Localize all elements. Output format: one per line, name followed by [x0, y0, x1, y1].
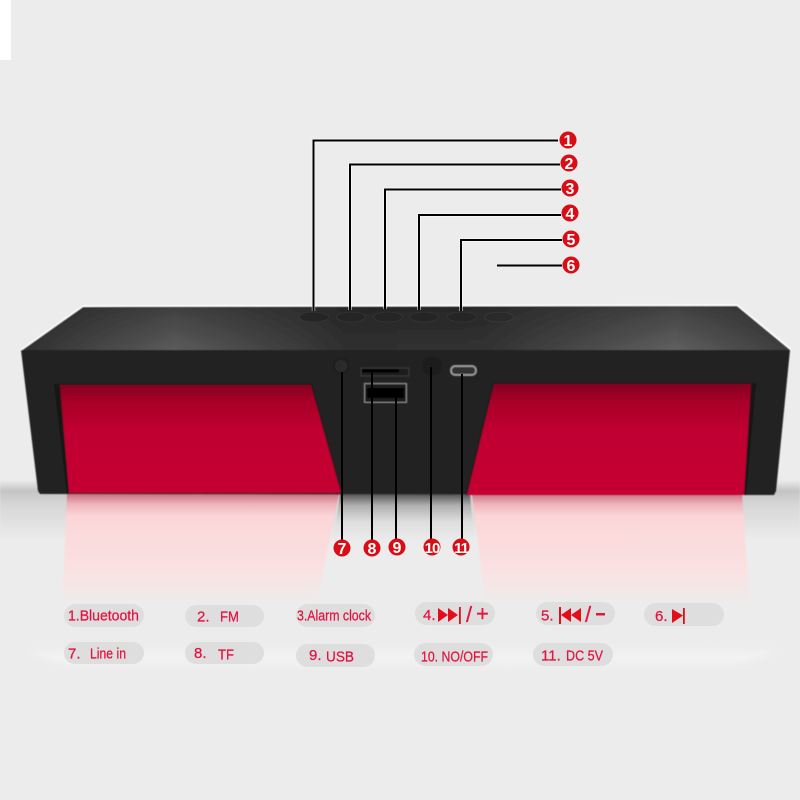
legend 5 previous and volume down: /	[585, 602, 592, 627]
badge 4: 4	[566, 206, 575, 223]
badge 7: 7	[338, 541, 347, 558]
USB port	[364, 384, 406, 402]
badge 10: 10	[425, 540, 440, 557]
left red reflection	[62, 494, 339, 606]
legend 9 USB	[296, 644, 375, 667]
badge 4	[562, 204, 578, 223]
badge 11: 11	[454, 540, 469, 557]
button 3	[374, 312, 402, 322]
legend 5 previous and volume down	[536, 602, 615, 627]
badge 5: 5	[567, 232, 576, 249]
legend 10 NO/OFF	[414, 643, 493, 666]
legend 11 DC 5V: 11.	[541, 648, 561, 664]
floor shadow band	[0, 480, 800, 540]
ports	[334, 356, 476, 402]
legend 7 Line in: Line in	[90, 646, 126, 662]
right red reflection	[472, 494, 750, 606]
micro USB port	[451, 366, 476, 375]
legend	[64, 601, 724, 667]
callout leaders bottom	[342, 367, 462, 540]
leader 1	[314, 140, 558, 311]
legend 10 NO/OFF: 10. NO/OFF	[421, 648, 488, 666]
legend 8 TF: TF	[218, 646, 234, 664]
TF card slot	[361, 368, 409, 376]
top edge highlight	[21, 305, 791, 350]
leader 10	[430, 367, 432, 540]
legend 6 play	[644, 603, 724, 626]
line-in jack	[334, 359, 348, 373]
leader 2	[350, 164, 560, 310]
right grille recess	[466, 383, 756, 495]
legend 4 next and volume up	[415, 601, 495, 627]
legend 8 TF	[185, 642, 264, 664]
white corner block	[0, 0, 11, 60]
legend 9 USB: USB	[326, 648, 354, 666]
light streak behind lower labels	[22, 645, 782, 669]
top face	[21, 306, 790, 350]
legend 3 Alarm clock	[296, 604, 375, 627]
button 1	[300, 312, 328, 322]
legend 5 previous and volume down: 5.	[541, 608, 554, 624]
legend 4 next and volume up: +	[476, 601, 489, 626]
leader 3	[385, 190, 561, 309]
leader 7	[341, 372, 343, 540]
left grille recess	[54, 384, 342, 494]
centre dark reflection	[334, 494, 474, 540]
legend 4 next and volume up: 4.	[423, 607, 436, 624]
badge 2	[560, 154, 578, 173]
leader 5	[461, 240, 562, 311]
badge 1	[560, 132, 576, 150]
legend 2 FM: 2.	[197, 608, 210, 626]
speaker floor reflections	[62, 494, 750, 606]
legend 3 Alarm clock: 3.Alarm clock	[297, 608, 371, 624]
badge 6	[562, 256, 580, 275]
badge 9	[388, 538, 406, 557]
badge 3	[562, 180, 578, 198]
badge 2: 2	[565, 156, 574, 173]
badge 3: 3	[566, 181, 575, 198]
legend 11 DC 5V	[533, 643, 613, 666]
legend 11 DC 5V: DC 5V	[566, 648, 603, 664]
legend 1 Bluetooth: 1.Bluetooth	[68, 608, 139, 624]
legend 2 FM	[185, 605, 264, 627]
leader 11	[461, 374, 463, 540]
button 5	[448, 312, 476, 322]
button 2	[336, 312, 366, 322]
leader 4	[419, 215, 561, 310]
leader 9	[395, 396, 397, 540]
legend 6 play: 6.	[655, 608, 668, 625]
speaker body	[21, 305, 791, 495]
legend 4 next and volume up: /	[466, 602, 473, 627]
badge 8	[364, 540, 380, 558]
legend 9 USB: 9.	[309, 647, 322, 664]
badge 1: 1	[564, 133, 573, 150]
number badges	[334, 132, 580, 558]
button 4	[410, 312, 438, 322]
top buttons	[300, 312, 514, 322]
button 6	[484, 312, 514, 322]
left red grille	[60, 385, 341, 493]
top face shading	[21, 306, 790, 350]
badge 8: 8	[368, 541, 377, 558]
badge 7	[334, 540, 350, 558]
legend 7 Line in: 7.	[68, 646, 81, 662]
front face	[21, 350, 790, 495]
badge 9: 9	[393, 540, 402, 557]
badge 6: 6	[567, 258, 576, 275]
right red grille	[467, 384, 751, 495]
leader 6	[497, 264, 562, 266]
leader 8	[371, 372, 373, 540]
power switch	[422, 356, 442, 376]
legend 7 Line in	[64, 642, 144, 664]
callout leaders top	[314, 140, 562, 311]
legend 2 FM: FM	[220, 608, 239, 626]
badge 5	[562, 230, 580, 249]
legend 8 TF: 8.	[194, 645, 207, 662]
